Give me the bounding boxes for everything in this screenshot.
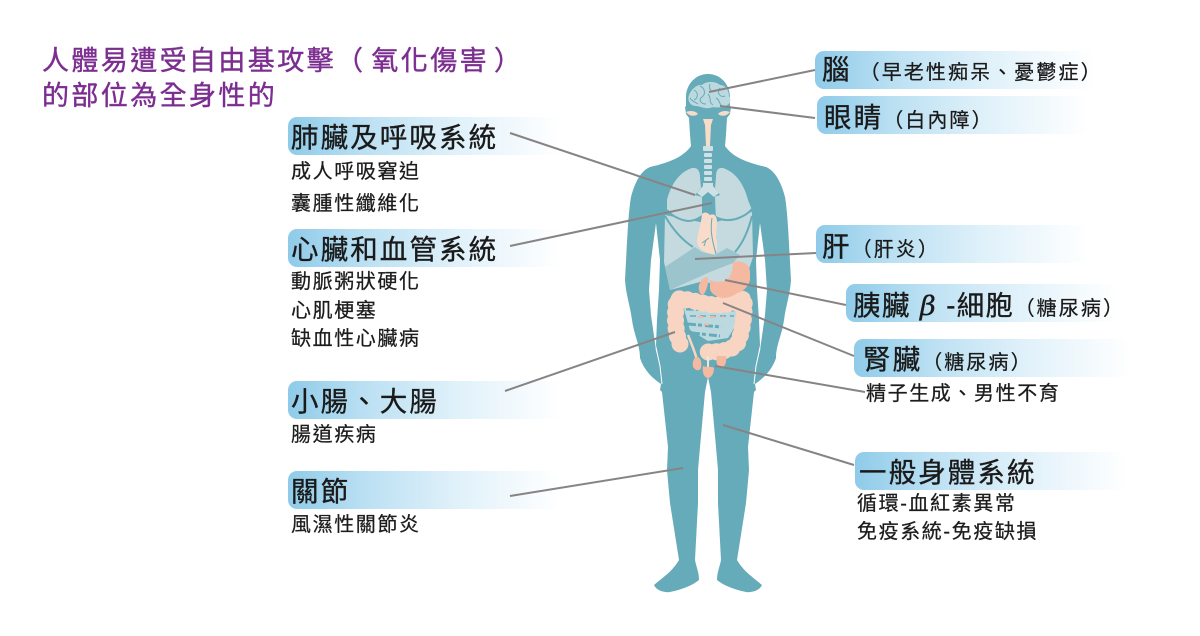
lower rib cage (664, 212, 753, 290)
small intestine (683, 306, 736, 341)
heart vessels (702, 218, 716, 254)
label: eyes: 眼睛（白內障） (824, 102, 994, 133)
list: lung diseases: 成人呼吸窘迫 (291, 161, 421, 183)
list: general diseases (857, 492, 1038, 543)
heart (697, 212, 717, 254)
gallbladder (699, 277, 708, 295)
label: joints: 關節 (291, 476, 350, 507)
label: general body systems: 一般身體系統 (859, 457, 1037, 488)
title (42, 46, 523, 111)
label: kidney (854, 339, 1130, 377)
right lung (714, 168, 752, 220)
hand outlines (656, 348, 760, 384)
liver (665, 247, 740, 290)
mediastinum (702, 193, 716, 222)
list: heart diseases (291, 270, 421, 350)
left lung (667, 168, 702, 220)
body silhouette (625, 74, 791, 592)
list: heart diseases: 缺血性心臟病 (291, 328, 421, 350)
list: general diseases: 免疫系統-免疫缺損 (857, 521, 1038, 543)
label: kidney: 腎臟（糖尿病） (863, 344, 1033, 375)
eyes (686, 111, 730, 116)
brain (688, 82, 730, 108)
list: general diseases: 循環-血紅素異常 (857, 493, 1016, 515)
diaphragm lines (665, 209, 752, 252)
list: lung diseases: 囊腫性纖維化 (291, 193, 421, 215)
label: pancreas: 胰臟 β -細胞（糖尿病） (853, 290, 1125, 322)
list: heart diseases: 心肌梗塞 (291, 300, 377, 322)
stomach (710, 261, 750, 298)
list: reproductive: 精子生成、男性不育 (866, 383, 1060, 405)
label: intestines: 小腸、大腸 (291, 386, 439, 417)
title: 人體易遭受自由基攻擊（氧化傷害） (42, 46, 523, 76)
label: intestines (288, 381, 560, 419)
label: lungs (288, 117, 560, 155)
label: joints (288, 471, 560, 509)
testes (693, 356, 726, 378)
title: 的部位為全身性的 (42, 81, 277, 111)
label: general body systems (855, 452, 1127, 490)
label: liver: 肝（肝炎） (822, 231, 940, 262)
list: joint disease: 風濕性關節炎 (291, 514, 421, 536)
label: heart and vessels: 心臟和血管系統 (291, 234, 498, 265)
arm gaps (649, 223, 767, 365)
trachea (697, 146, 719, 197)
appendix (688, 335, 697, 360)
label: heart and vessels (288, 229, 560, 267)
list: lung diseases (291, 160, 421, 215)
large intestine (675, 298, 744, 352)
label: liver (816, 225, 1088, 263)
label: eyes (817, 96, 1089, 134)
list: heart diseases: 動脈粥狀硬化 (291, 271, 421, 293)
nasal passage (703, 119, 713, 146)
list: intestinal disease: 腸道疾病 (291, 424, 377, 446)
label: lungs: 肺臟及呼吸系統 (291, 122, 498, 153)
label: brain: 腦 （早老性痴呆、憂鬱症） (822, 54, 1103, 85)
urethra (707, 356, 709, 367)
